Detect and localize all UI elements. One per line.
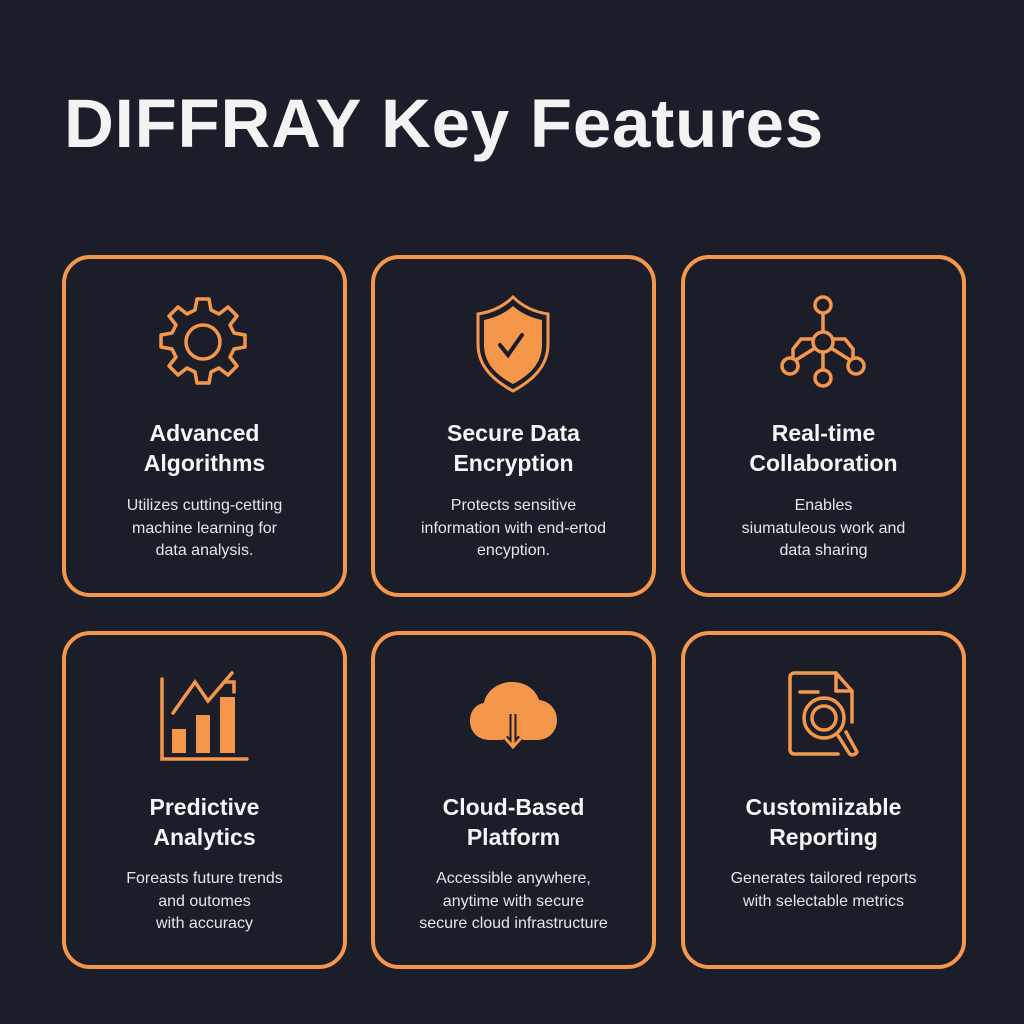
- heading: Analytics: [153, 824, 256, 850]
- text: with selectable metrics: [743, 892, 904, 910]
- heading: Predictive: [150, 794, 259, 820]
- text: [127, 497, 282, 559]
- heading: [749, 420, 898, 476]
- title: DIFFRAY Key Features: [64, 85, 824, 162]
- heading: Advanced: [150, 420, 259, 446]
- icon: shield: [476, 295, 550, 393]
- text: Foreasts future trends: [126, 870, 283, 887]
- heading: Customiizable: [746, 794, 901, 820]
- panel: cloud-based platform: [371, 631, 656, 969]
- text: Protects sensitive: [451, 497, 576, 514]
- heading: Platform: [467, 824, 560, 850]
- panel: predictive analytics: [62, 631, 347, 969]
- text: [731, 870, 916, 910]
- icon: report search: [788, 671, 859, 757]
- heading: Real-time: [772, 420, 875, 446]
- heading: [150, 794, 259, 850]
- icon: network: [780, 295, 866, 388]
- text: machine learning for: [132, 520, 277, 536]
- text: [421, 497, 606, 559]
- text: encyption.: [477, 542, 550, 559]
- heading: [447, 420, 580, 476]
- text: Utilizes cutting-cetting: [127, 497, 282, 514]
- text: anytime with secure: [443, 892, 584, 910]
- heading: Algorithms: [144, 450, 265, 476]
- panel: secure data encryption: [371, 255, 656, 597]
- heading: Cloud-Based: [443, 794, 584, 820]
- text: secure cloud infrastructure: [419, 915, 608, 932]
- icon: gear: [159, 297, 247, 385]
- icon: bar chart: [160, 671, 249, 761]
- heading: Encryption: [453, 450, 574, 476]
- icon: cloud: [470, 682, 557, 750]
- text: Accessible anywhere,: [436, 870, 591, 887]
- text: siumatuleous work and: [742, 520, 905, 536]
- text: and outomes: [158, 892, 251, 910]
- text: Enables: [795, 497, 852, 514]
- panel: real-time collaboration: [681, 255, 966, 597]
- text: [419, 870, 608, 932]
- text: data analysis.: [156, 542, 253, 559]
- text: [742, 497, 905, 559]
- heading: Reporting: [769, 824, 878, 850]
- text: with accuracy: [156, 915, 253, 932]
- heading: [443, 794, 584, 850]
- heading: Collaboration: [749, 450, 898, 476]
- panel: advanced algorithms: [62, 255, 347, 597]
- heading: Secure Data: [447, 420, 580, 446]
- text: Generates tailored reports: [731, 870, 916, 887]
- text: [126, 870, 283, 932]
- heading: [746, 794, 901, 850]
- heading: [144, 420, 265, 476]
- text: information with end-ertod: [421, 520, 606, 536]
- panel: customizable reporting: [681, 631, 966, 969]
- text: data sharing: [779, 542, 868, 559]
